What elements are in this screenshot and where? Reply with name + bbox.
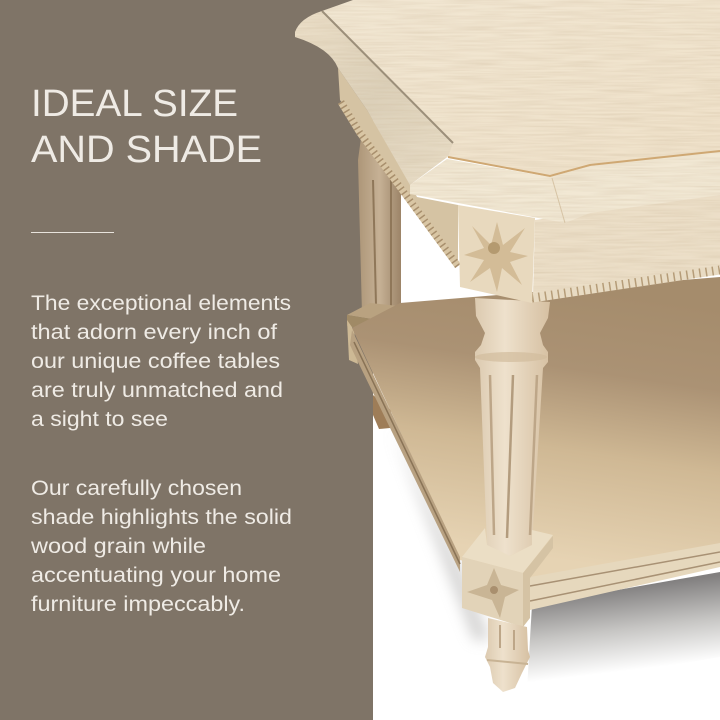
table top inlay lines (322, 11, 720, 176)
paragraph one: our unique coffee tables (31, 350, 280, 373)
background panel (0, 0, 373, 720)
back leg (347, 138, 417, 364)
upper corner block (458, 205, 535, 303)
heading: IDEAL SIZE (31, 83, 238, 125)
paragraph two: furniture impeccably. (31, 593, 245, 616)
paragraph one: a sight to see (31, 408, 168, 431)
divider (31, 232, 114, 233)
paragraph two: accentuating your home (31, 564, 281, 587)
table foot (485, 618, 530, 692)
table top surface (322, 0, 720, 177)
paragraph two: shade highlights the solid (31, 506, 292, 529)
paragraph two: wood grain while (30, 535, 206, 558)
back foot (373, 395, 391, 429)
paragraph two: Our carefully chosen (31, 477, 242, 500)
paragraph one: are truly unmatched and (31, 379, 283, 402)
paragraph one (31, 292, 291, 431)
table top edge left (295, 11, 453, 185)
table top edge front (410, 150, 720, 223)
paragraph two (30, 477, 292, 616)
apron front (533, 194, 720, 295)
paragraph one: The exceptional elements (31, 292, 291, 315)
heading: AND SHADE (31, 129, 262, 171)
paragraph one: that adorn every inch of (31, 321, 277, 344)
rope trim front (532, 270, 720, 298)
lower shelf (350, 277, 720, 610)
apron side (338, 68, 458, 265)
heading (31, 83, 262, 171)
rope trim side (341, 102, 458, 266)
table leg (475, 298, 550, 556)
floor shadow (392, 428, 720, 690)
lower corner block (462, 528, 553, 627)
